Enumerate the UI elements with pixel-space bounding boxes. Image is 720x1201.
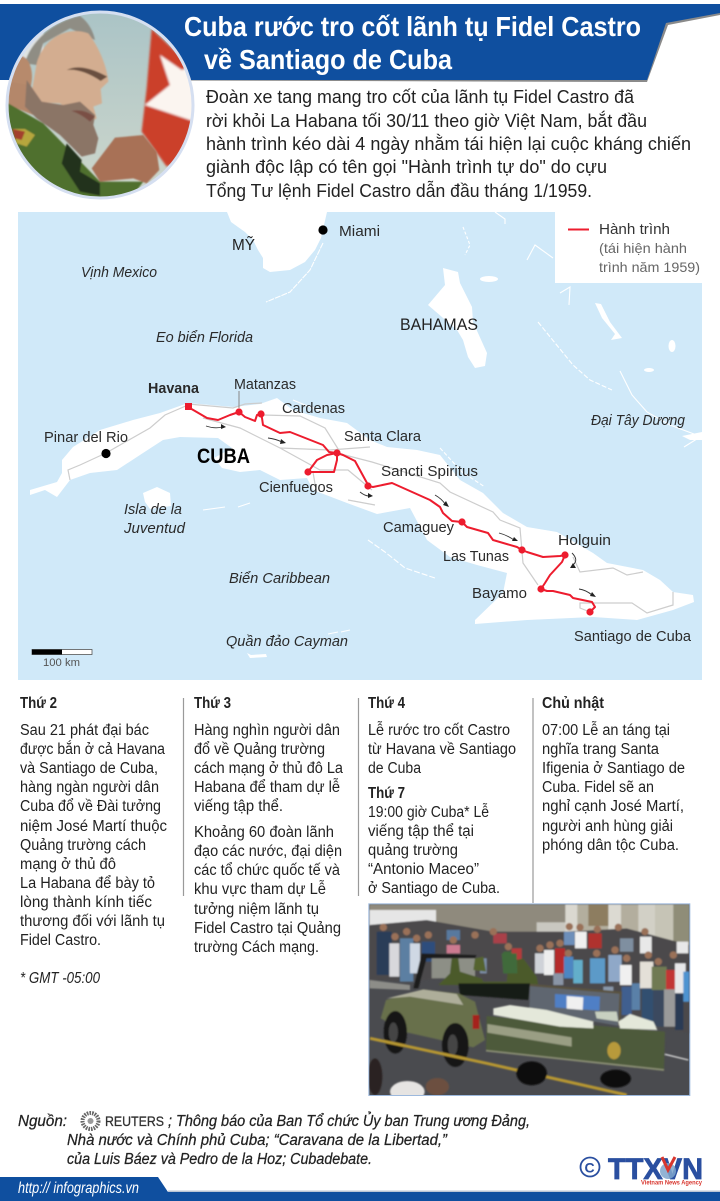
intro paragraph <box>206 86 691 201</box>
Pinar del Rio marker <box>101 449 111 458</box>
legend: trình năm 1959) <box>599 259 700 275</box>
map labels: Santiago de Cuba <box>574 628 692 645</box>
intro paragraph: Đoàn xe tang mang tro cốt của lãnh tụ Fidel Castro đã <box>206 86 635 107</box>
column: Thứ 2: và Santiago de Cuba, <box>20 760 158 777</box>
intro paragraph: Tổng Tư lệnh Fidel Castro dẫn đầu tháng 1/1959. <box>206 180 592 201</box>
column: Thứ 3: khu vực tham dự Lễ <box>194 881 326 898</box>
column: Thứ 4 and Thứ 7: “Antonio Maceo” <box>368 861 479 878</box>
column: Chủ nhật: nghĩa trang Santa <box>542 741 659 758</box>
column: Thứ 2: lòng thành kính tiếc <box>20 894 152 911</box>
column: Thứ 4 and Thứ 7: Thứ 4 <box>368 695 405 712</box>
column: Thứ 3: đạo các nước, đại diện <box>194 843 342 860</box>
column dividers <box>184 698 533 903</box>
jeep <box>369 953 538 1067</box>
sources: Nhà nước và Chính phủ Cuba; “Caravana de la Libertad,” <box>67 1132 448 1149</box>
title <box>184 11 641 75</box>
column: Thứ 3: Hàng nghìn người dân <box>194 722 340 739</box>
column: Chủ nhật: nghỉ cạnh José Martí, <box>542 798 684 815</box>
map labels: Cienfuegos <box>259 479 333 496</box>
column: Thứ 2 <box>20 695 167 987</box>
map labels: Juventud <box>123 520 186 537</box>
column: Thứ 4 and Thứ 7: từ Havana về Santiago <box>368 741 516 758</box>
column: Thứ 3: tưởng niệm lãnh tụ <box>194 901 319 918</box>
map labels: Pinar del Rio <box>44 429 128 446</box>
sources: ; Thông báo của Ban Tổ chức Ủy ban Trung ương Đảng, <box>168 1112 530 1130</box>
column: Thứ 2: mạng ở thủ đô <box>20 856 116 873</box>
title: Cuba rước tro cốt lãnh tụ Fidel Castro <box>184 11 641 42</box>
column: Thứ 2: Sau 21 phát đại bác <box>20 722 149 739</box>
column: Chủ nhật: người anh hùng giải <box>542 818 673 835</box>
Reuters logo: REUTERS <box>105 1113 164 1129</box>
map labels: Biển Caribbean <box>229 570 330 587</box>
column: Chủ nhật: 07:00 Lễ an táng tại <box>542 722 670 739</box>
column: Chủ nhật: Chủ nhật <box>542 695 604 712</box>
intro paragraph: hành trình kéo dài 4 ngày nhằm tái hiện lại cuộc kháng chiến <box>206 133 691 154</box>
title: về Santiago de Cuba <box>204 44 452 75</box>
journey route <box>185 403 595 616</box>
column: Thứ 3: Habana để tham dự lễ <box>194 779 340 796</box>
land: Florida <box>227 212 327 272</box>
column: Thứ 2: niệm José Martí thuộc <box>20 818 167 835</box>
column: Thứ 3: cách mạng ở thủ đô La <box>194 760 343 777</box>
column: Chủ nhật <box>542 695 685 854</box>
column: Thứ 3: Khoảng 60 đoàn lãnh <box>194 824 334 841</box>
direction arrows <box>206 424 596 597</box>
column: Chủ nhật: Ifigenia ở Santiago de <box>542 760 685 777</box>
legend <box>555 212 702 283</box>
map labels: Las Tunas <box>443 548 509 565</box>
map labels: Isla de la <box>124 501 182 518</box>
scale bar: 100 km <box>43 657 80 669</box>
Matanzas leader <box>238 391 240 408</box>
scale bar <box>32 650 92 669</box>
TTXVN logo: TTXVN <box>608 1153 703 1186</box>
road stripes <box>370 1038 627 1095</box>
sources <box>18 1112 530 1168</box>
legend: Hành trình <box>599 221 670 238</box>
flowers <box>493 1005 593 1028</box>
footnote: * GMT -05:00 <box>20 970 100 987</box>
column: Thứ 4 and Thứ 7: viếng tập thể tại <box>368 823 474 840</box>
column: Thứ 2: Fidel Castro. <box>20 932 101 949</box>
map labels: MỸ <box>232 234 255 254</box>
column: Thứ 2: Thứ 2 <box>20 695 57 712</box>
backdrop building <box>369 904 690 946</box>
column: Thứ 3: viếng tập thể. <box>194 798 283 815</box>
foreground spectators <box>369 1058 450 1095</box>
column: Thứ 2: thương đối với lãnh tụ <box>20 913 165 930</box>
website url: http:// infographics.vn <box>18 1180 139 1197</box>
map panel <box>18 212 702 680</box>
column: Thứ 4 and Thứ 7: de Cuba <box>368 760 421 777</box>
column: Thứ 2: La Habana để bày tỏ <box>20 875 155 892</box>
column: Thứ 4 and Thứ 7 <box>368 695 516 897</box>
map labels: Sancti Spiritus <box>381 463 478 480</box>
column: Thứ 3: trường Cách mạng. <box>194 939 319 956</box>
column: Thứ 2: Cuba đổ về Đài tưởng <box>20 798 161 815</box>
column: Thứ 3: Fidel Castro tại Quảng <box>194 920 341 937</box>
map labels: Holguin <box>558 532 611 549</box>
title banner <box>0 4 720 82</box>
map labels: Bayamo <box>472 585 527 602</box>
map labels: Santa Clara <box>344 428 422 445</box>
column: Thứ 4 and Thứ 7: 19:00 giờ Cuba* Lễ <box>368 804 489 821</box>
map labels: Miami <box>339 223 380 240</box>
land: small islands <box>143 400 485 658</box>
map labels: Vịnh Mexico <box>81 264 157 281</box>
column: Thứ 3: đổ về Quảng trường <box>194 741 325 758</box>
column: Thứ 4 and Thứ 7: ở Santiago de Cuba. <box>368 880 500 897</box>
map labels: Eo biển Florida <box>156 329 253 346</box>
photo: funeral cortege <box>368 903 690 1102</box>
column: Thứ 3: Thứ 3 <box>194 695 231 712</box>
map labels: Havana <box>148 380 200 397</box>
footer bar <box>0 1177 720 1201</box>
portrait of Fidel Castro <box>6 10 194 200</box>
column: Thứ 4 and Thứ 7: Lễ rước tro cốt Castro <box>368 722 510 739</box>
map labels: Quần đảo Cayman <box>226 633 348 650</box>
land: Cuba <box>30 398 694 624</box>
map labels: Camaguey <box>383 519 454 536</box>
land: Bahamas <box>266 212 702 447</box>
intro paragraph: giành độc lập có tên gọi "Hành trình tự do" do cựu <box>206 156 607 177</box>
column: Thứ 2: hàng ngàn người dân <box>20 779 159 796</box>
map labels: CUBA <box>197 445 250 468</box>
intro paragraph: rời khỏi La Habana tối 30/11 theo giờ Việt Nam, bắt đầu <box>206 110 647 131</box>
map labels: Matanzas <box>234 376 296 393</box>
column: Chủ nhật: Cuba. Fidel sẽ an <box>542 779 654 796</box>
Miami marker <box>318 225 328 235</box>
TTXVN logo: Vietnam News Agency <box>641 1180 702 1186</box>
sources: Nguồn: <box>18 1113 67 1130</box>
Reuters logo <box>82 1113 164 1129</box>
crowd <box>369 920 689 1033</box>
map labels: BAHAMAS <box>400 315 478 334</box>
column: Thứ 4 and Thứ 7: Thứ 7 <box>368 785 405 802</box>
roads <box>68 403 673 613</box>
column: Thứ 2: Quảng trường cách <box>20 837 146 854</box>
trailer <box>486 985 665 1088</box>
column: Chủ nhật: phóng dân tộc Cuba. <box>542 837 679 854</box>
map labels: Đại Tây Dương <box>591 412 686 429</box>
legend: (tái hiện hành <box>599 240 687 256</box>
sources: của Luis Báez và Pedro de la Hoz; Cubadebate. <box>67 1151 372 1168</box>
column: Thứ 3 <box>194 695 343 956</box>
column: Thứ 4 and Thứ 7: quảng trường <box>368 842 458 859</box>
map labels: Cardenas <box>282 400 345 417</box>
TTXVN logo: C <box>584 1160 595 1176</box>
map labels <box>44 223 692 650</box>
column: Thứ 3: các tổ chức quốc tế và <box>194 862 340 879</box>
column: Thứ 2: được bắn ở cả Havana <box>20 741 165 758</box>
